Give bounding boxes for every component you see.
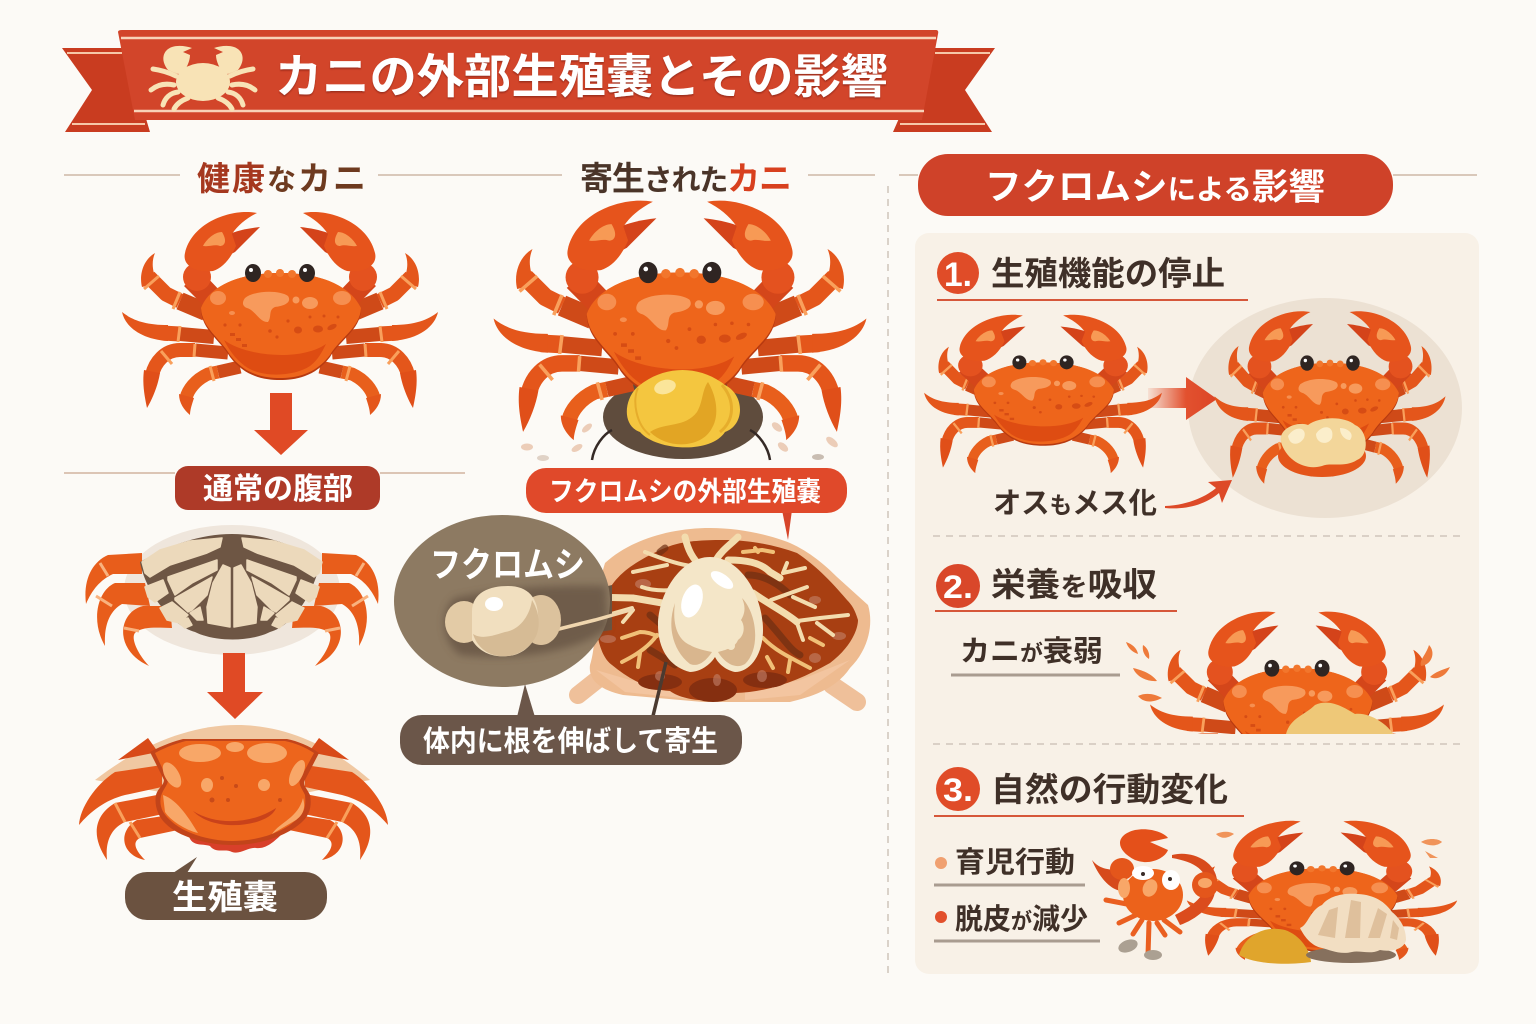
label: root parasitism: 体内に根を伸ばして寄生 [423, 725, 718, 758]
number badge 2 [936, 564, 980, 608]
label: sacculina external sac: フクロムシの外部生殖嚢 [549, 477, 821, 507]
illustration: opened crab with roots [578, 528, 870, 716]
list item: brooding [934, 846, 1085, 885]
label: normal abdomen [64, 466, 465, 510]
icon: sacculina body [445, 586, 561, 656]
heading pill: effects of sacculina: フクロムシによる影響 [985, 166, 1325, 207]
divider: column separator [887, 186, 889, 978]
icon: splash marks [1216, 832, 1442, 858]
illustration: healthy crab [122, 212, 438, 415]
illustration: normal abdomen underside [85, 525, 379, 666]
label: root parasitism [400, 715, 742, 765]
illustration: parasitized crab [494, 201, 866, 461]
label: sacculina external sac [526, 468, 847, 540]
illustration: female abdomen with reproductive sac [79, 725, 388, 860]
panel: effects [915, 233, 1479, 974]
text: crab weakens: カニが衰弱 [960, 635, 1103, 668]
icon: yellow rock [1239, 929, 1311, 964]
label: reproductive sac [125, 857, 327, 920]
icon: shell [1300, 894, 1406, 953]
arrow: to normal abdomen [254, 393, 308, 455]
icon: banner crab [151, 46, 255, 109]
icon: root sac [658, 557, 763, 672]
section 3: behavior change [934, 767, 1457, 964]
arrow: to reproductive sac [207, 653, 263, 719]
label: reproductive sac: 生殖嚢 [172, 879, 278, 917]
arrow: curved to crab [1165, 480, 1232, 508]
illustration: feminized crab with sac [1215, 311, 1445, 484]
number badge 1 [937, 252, 979, 294]
list item: brooding: 育児行動 [955, 846, 1075, 879]
illustration: weakened crab [1150, 612, 1444, 734]
callout: sacculina bubble [394, 515, 634, 717]
list item: less molting [934, 903, 1100, 941]
divider [933, 535, 1462, 537]
banner main [118, 30, 938, 120]
heading pill: effects of sacculina [899, 154, 1477, 216]
icon: pebbles [1117, 937, 1162, 960]
heading: healthy crab: 健康なカニ [197, 160, 366, 197]
banner left tail [62, 48, 150, 132]
heading 3: 自然の行動変化 [991, 771, 1228, 808]
illustration: normal crab [924, 315, 1162, 473]
heading 2: 栄養を吸収 [991, 566, 1157, 603]
callout: sacculina bubble: フクロムシ [430, 546, 585, 585]
text: male feminized: オスもメス化 [993, 487, 1157, 520]
number badge 3 [936, 767, 980, 811]
title banner [62, 30, 995, 132]
illustration: big crab with shell [1187, 821, 1457, 964]
list item: less molting: 脱皮が減少 [955, 903, 1088, 936]
divider [933, 743, 1462, 745]
section 1: reproductive function stop [924, 252, 1462, 520]
heading: parasitized crab: 寄生されたカニ [580, 160, 792, 197]
section 2: nutrient absorption [935, 564, 1450, 734]
arrow: transformation [1148, 377, 1217, 420]
illustration: feminized crab circle [1188, 298, 1462, 518]
banner right tail [893, 48, 995, 132]
number badge 3: 3. [943, 772, 973, 808]
illustration: small panicked crab [1092, 829, 1218, 955]
title: カニの外部生殖嚢とその影響 [275, 50, 888, 103]
number badge 2: 2. [943, 569, 973, 605]
icon: yellow sac [627, 370, 740, 447]
number badge 1: 1. [944, 256, 972, 294]
icon: sweat drops [1126, 642, 1450, 702]
label: normal abdomen: 通常の腹部 [203, 473, 353, 506]
heading 1: 生殖機能の停止 [991, 255, 1225, 292]
